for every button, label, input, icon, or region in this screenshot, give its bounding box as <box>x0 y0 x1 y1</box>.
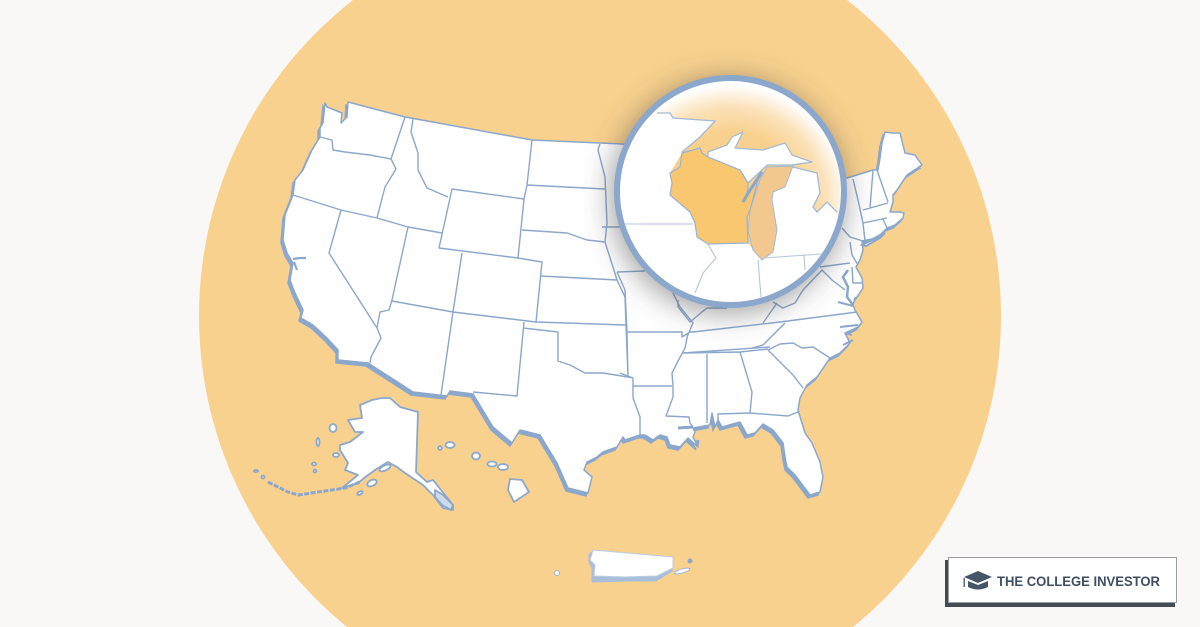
chesapeake bay <box>843 270 853 305</box>
upper peninsula <box>708 132 812 183</box>
lake pontchartrain <box>678 427 698 446</box>
alaska <box>254 398 453 510</box>
magnifier shadow <box>611 79 845 313</box>
san francisco bay <box>293 258 306 270</box>
contiguous US map <box>281 102 922 498</box>
superior shore and lower michigan shoreline <box>657 113 837 212</box>
magnifier lens: wisconsin zoom <box>614 75 847 308</box>
lake michigan <box>748 166 793 260</box>
long island <box>862 233 885 246</box>
background circle <box>199 0 1001 627</box>
state borders <box>293 117 888 435</box>
lens rim <box>617 78 844 305</box>
green bay <box>743 172 762 202</box>
wisconsin <box>670 148 758 244</box>
land west of great lakes <box>620 114 838 302</box>
brand name: THE COLLEGE INVESTOR <box>997 574 1160 589</box>
logo badge <box>945 558 1176 607</box>
inset state borders <box>625 224 822 297</box>
outer banks sounds <box>838 302 858 345</box>
puerto rico <box>554 550 692 582</box>
icon: graduation cap <box>964 571 992 590</box>
hawaii <box>438 442 529 502</box>
